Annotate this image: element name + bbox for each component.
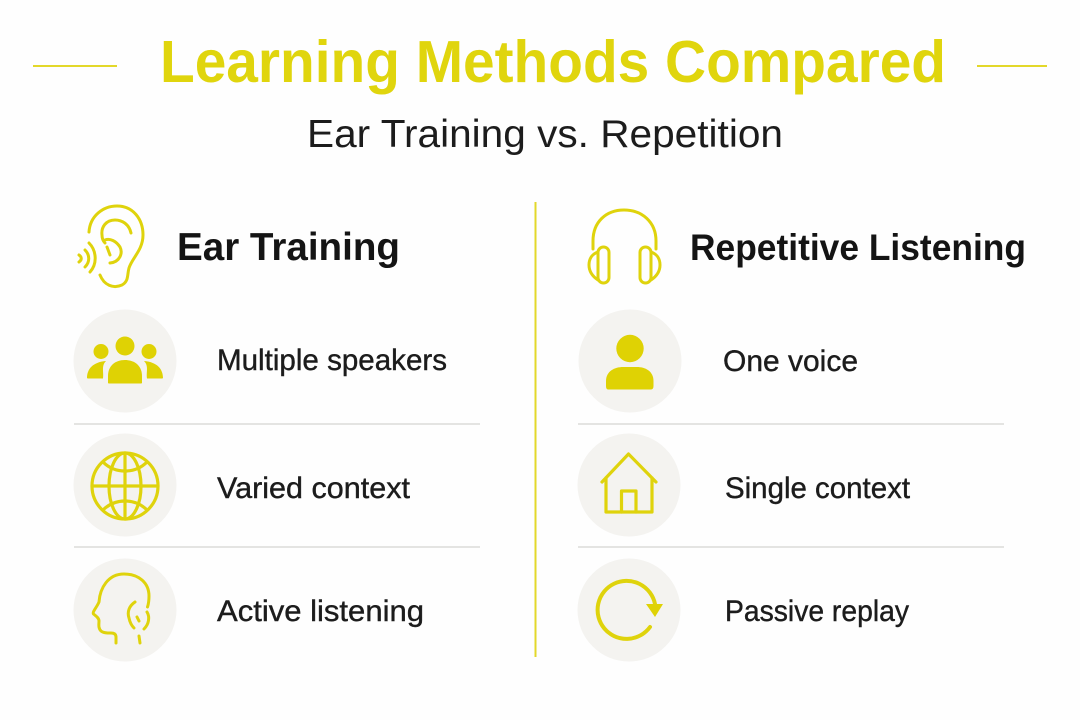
icon: ear with sound waves (79, 206, 143, 287)
row: passive replay: Passive replay (725, 595, 909, 628)
row: active listening (74, 558, 424, 662)
row: single context: Single context (725, 472, 911, 505)
icon: headphones (589, 210, 660, 283)
heading: repetitive listening: Repetitive Listening (690, 227, 1026, 268)
row: multiple speakers: Multiple speakers (217, 344, 447, 377)
title: Learning Methods Compared (160, 29, 946, 95)
row: varied context: Varied context (217, 472, 411, 505)
row: varied context (74, 434, 411, 536)
row: one voice (578, 310, 858, 412)
subtitle: Ear Training vs. Repetition (307, 113, 783, 156)
row: multiple speakers (74, 310, 447, 412)
icon: house (578, 434, 680, 536)
icon: replay arrow (578, 558, 680, 662)
row: one voice: One voice (723, 345, 858, 378)
icon: single person (578, 310, 682, 412)
panel: repetitive listening (578, 210, 1026, 662)
row: single context (578, 434, 911, 536)
row: passive replay (578, 558, 909, 662)
heading: ear training: Ear Training (177, 226, 400, 269)
row: active listening: Active listening (217, 595, 424, 628)
center divider (534, 202, 536, 657)
icon: group of people (74, 310, 176, 412)
icon: head with ear (74, 558, 176, 662)
icon: globe (74, 434, 176, 536)
panel: ear training (74, 206, 480, 662)
